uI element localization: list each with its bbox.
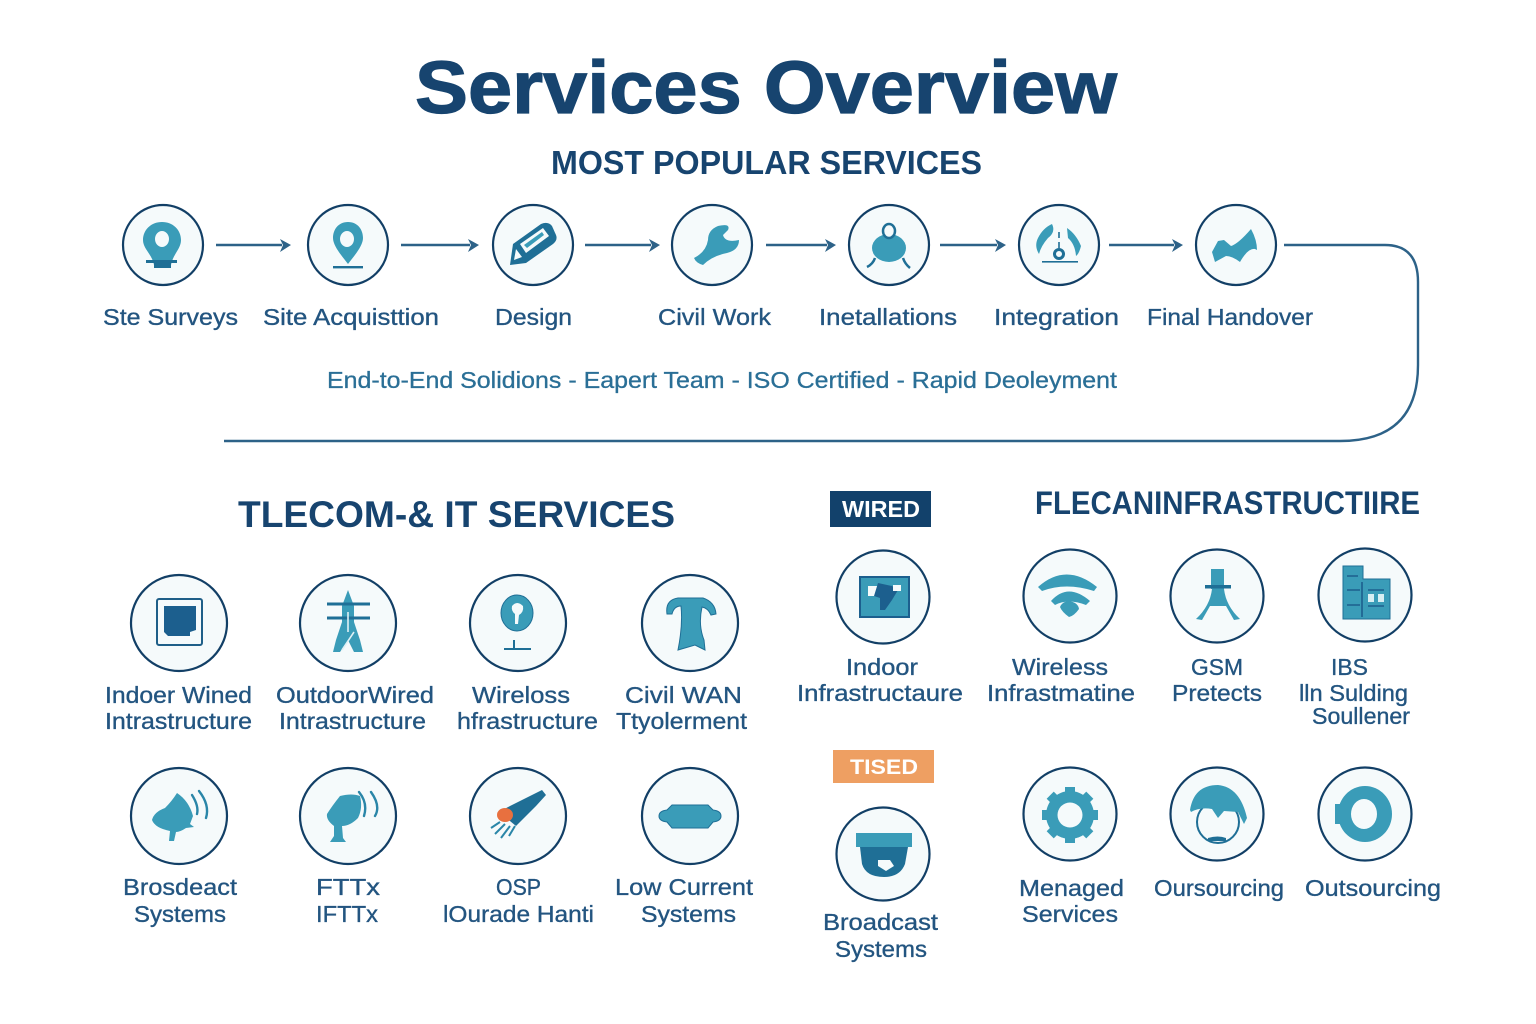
service: managed services: Services (1022, 901, 1118, 927)
service: wireless infrastructure: Wireless (1012, 654, 1108, 680)
service: ibs: IBS (1331, 654, 1368, 680)
icon: wifi (1038, 574, 1097, 617)
service: ibs (1299, 548, 1412, 729)
icon: gsm tower (1196, 569, 1240, 620)
arrow 2 (401, 244, 470, 246)
service: fttx: FTTx (316, 874, 380, 900)
service: outdoor wired: Intrastructure (279, 708, 426, 734)
service: gsm projects: Pretects (1172, 680, 1262, 706)
icon: civil wrench (694, 225, 739, 265)
service: ibs: lln Sulding (1299, 680, 1408, 706)
arrow 5 (940, 244, 997, 246)
icon: t-shaped mast (667, 598, 716, 650)
service: outdoor wired: OutdoorWired (276, 682, 434, 708)
service: gsm projects: GSM (1191, 654, 1243, 680)
connector: loop from final handover (224, 245, 1418, 441)
service: indoor wired: Indoer Wined (105, 682, 252, 708)
service: ibs: Soullener (1312, 703, 1410, 729)
service: outdoor wired (276, 575, 434, 734)
step: civil work (658, 205, 771, 330)
icon: fiber bundle (491, 790, 546, 838)
step: site acquisition: Site Acquisttion (263, 304, 439, 330)
icon: location pin (333, 222, 363, 268)
service: civil wan: Civil WAN (625, 682, 742, 708)
service: gsm projects (1170, 550, 1264, 706)
arrowhead 1 (280, 239, 291, 252)
service: indoor infrastructure (797, 550, 963, 706)
service: wireless: hfrastructure (457, 708, 598, 734)
icon: wired panel (157, 599, 202, 645)
service: outsourcing ring (1305, 768, 1441, 901)
badge: tised: TISED (850, 756, 918, 779)
arrow 1 (216, 244, 282, 246)
step: installations (819, 205, 957, 330)
heading: field infrastructure: FLECANINFRASTRUCTIIRE (1035, 485, 1420, 521)
service: broadcast camera: Systems (835, 936, 927, 962)
arrow 3 (585, 244, 651, 246)
service: low current: Low Current (615, 874, 754, 900)
icon: wireless node (501, 595, 533, 649)
badge: tised (833, 750, 934, 783)
service: indoor infrastructure: Indoor (846, 654, 918, 680)
badge: wired: WIRED (842, 496, 920, 522)
step: final handover: Final Handover (1147, 304, 1313, 330)
service: civil wan (616, 575, 747, 734)
icon: dome camera (856, 833, 912, 877)
icon: gear (1042, 787, 1098, 843)
title: Services Overview (415, 46, 1117, 129)
service: broadcast systems (123, 768, 238, 927)
service: osp (443, 768, 594, 927)
service: broadcast camera: Broadcast (823, 909, 939, 935)
icon: transmission tower (327, 590, 370, 652)
service: broadcast camera (823, 808, 939, 962)
arrowhead 5 (995, 239, 1006, 252)
service: indoor wired: Intrastructure (105, 708, 252, 734)
service: wireless infrastructure: Infrastmatine (987, 680, 1135, 706)
step: design: Design (495, 304, 572, 330)
icon: survey pin (143, 222, 181, 268)
arrowhead 4 (825, 239, 836, 252)
panel: telecom and IT services (105, 494, 754, 927)
icon: installation (867, 224, 910, 268)
service: low current: Systems (641, 901, 736, 927)
service: outsourcing ring: Outsourcing (1305, 875, 1441, 901)
step: civil work: Civil Work (658, 304, 771, 330)
service: fttx (300, 768, 396, 927)
service: wireless: Wireloss (472, 682, 570, 708)
step: integration (994, 205, 1119, 330)
service: osp: OSP (496, 874, 541, 900)
service: civil wan: Ttyolerment (616, 708, 747, 734)
step: site acquisition (263, 205, 439, 330)
arrow 6 (1109, 244, 1174, 246)
badge: wired (830, 491, 931, 527)
arrow 4 (766, 244, 827, 246)
icon: globe (1190, 785, 1247, 843)
process flow: most popular services (103, 205, 1418, 441)
step: design (493, 205, 573, 330)
icon: integration hands (1036, 224, 1081, 263)
icon: fttx antenna (327, 792, 377, 842)
heading: telecom and IT services: TLECOM-& IT SERVICES (238, 494, 675, 535)
subheading: most popular services: MOST POPULAR SERVICES (551, 144, 982, 181)
service: osp: lOurade Hanti (443, 901, 594, 927)
service: wireless infrastructure (987, 550, 1135, 706)
step: site surveys (103, 205, 238, 330)
arrowhead 2 (468, 239, 479, 252)
tagline: End-to-End Solidions - Eapert Team - ISO Certified - Rapid Deoleyment (327, 367, 1118, 393)
service: outsourcing globe: Oursourcing (1154, 875, 1284, 901)
step: final handover (1147, 205, 1313, 330)
service: managed services (1019, 768, 1124, 927)
service: outsourcing globe (1154, 768, 1284, 901)
icon: handshake (1212, 229, 1257, 262)
service: broadcast systems: Brosdeact (123, 874, 238, 900)
icon: broadcast dish (152, 791, 207, 841)
icon: pencil (510, 223, 557, 265)
service: low current (615, 768, 754, 927)
step: site surveys: Ste Surveys (103, 304, 238, 330)
icon: low current connector (659, 805, 721, 828)
service: wireless (457, 575, 598, 734)
icon: in-building (1343, 566, 1390, 619)
panel: field infrastructure (797, 485, 1441, 962)
arrowhead 6 (1172, 239, 1183, 252)
icon: ring gear (1335, 786, 1392, 842)
service: managed services: Menaged (1019, 875, 1124, 901)
service: indoor wired (105, 575, 252, 734)
service: broadcast systems: Systems (134, 901, 226, 927)
step: installations: Inetallations (819, 304, 957, 330)
icon: indoor monitor (860, 577, 909, 617)
service: fttx: IFTTx (316, 901, 378, 927)
step: integration: Integration (994, 304, 1119, 330)
arrowhead 3 (649, 239, 660, 252)
service: indoor infrastructure: Infrastructaure (797, 680, 963, 706)
